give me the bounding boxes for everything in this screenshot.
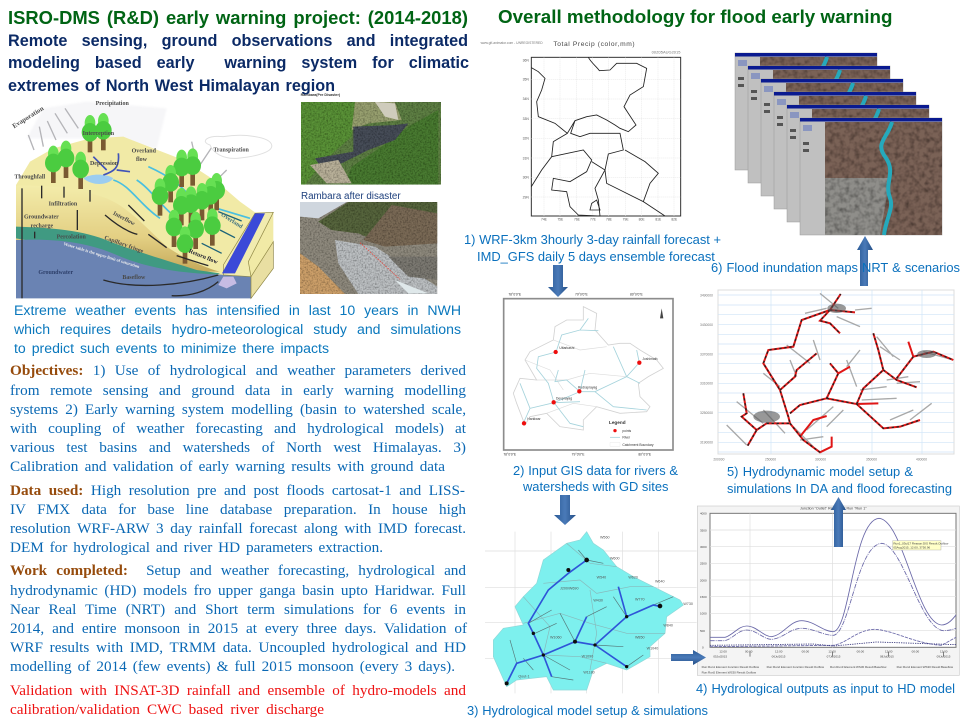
map header text: 00Z05AUG2015: [652, 49, 681, 54]
chart tooltip and axis text: Run:Run1 Element:Junction Result:Outflow: [702, 665, 760, 669]
heading: methodology: Overall methodology for flood early warning: [498, 6, 892, 27]
diagram: hydrological water cycle: [11, 101, 273, 298]
diagram labels: Overland: [220, 212, 244, 231]
chart tooltip and axis text: 12:00: [940, 650, 948, 654]
caption: step 6: 6) Flood inundation maps NRT & scenarios: [711, 260, 960, 275]
map: hydrological model basin: W1180: [583, 670, 595, 674]
caption: step 2: [513, 463, 678, 494]
diagram labels: Interflow: [112, 211, 136, 228]
intro text block: to predict such events to minimize there impacts: [14, 340, 329, 356]
map legend: Catchment Boundary: [622, 443, 654, 447]
axis ticks: 3430000: [700, 323, 713, 327]
map: WRF total precipitation: 35N: [523, 78, 529, 82]
map: WRF total precipitation: 30N: [523, 176, 529, 180]
map: WRF total precipitation: 74E: [541, 218, 548, 222]
text block: objectives: various test basins and watersheds of North west Himalayas. 3): [10, 439, 466, 456]
chart tooltip and axis text: 0: [702, 646, 704, 650]
diagram labels: Depression: [90, 161, 119, 167]
diagram labels: Groundwater: [24, 214, 59, 220]
map: WRF total precipitation: 78E: [606, 218, 613, 222]
text block: work completed: hydrodynamic (HD) models fro upper ganga basin upto Haridwar. Full: [10, 582, 466, 599]
caption: step 3: 3) Hydrological model setup & simulations: [467, 703, 708, 718]
window 6: front map: [800, 118, 942, 235]
map: WRF total precipitation: 29N: [523, 195, 529, 199]
map: GIS rivers and watersheds: Uttarkashi: [559, 346, 575, 350]
caption: step 5: [727, 464, 952, 496]
chart tooltip and axis text: 12:00: [719, 650, 727, 654]
map: hydrological model basin: W540: [597, 575, 606, 579]
intro text block: [14, 302, 461, 356]
chart tooltip and axis text: 05Jul2015: [713, 654, 727, 658]
text block: data used: resolution WRF-ARW 3 day rainfall forecast along with IMD forecast.: [10, 520, 466, 537]
arrow: step 4 to step 5: [831, 497, 846, 547]
caption: step 1: IMD_GFS daily 5 days ensemble forecast: [477, 249, 715, 264]
map: WRF total precipitation: 82E: [671, 218, 678, 222]
chart tooltip and axis text: 00:00: [745, 650, 753, 654]
chart tooltip and axis text: 3500: [700, 528, 707, 532]
map: GIS rivers and watersheds: 79°0'0"E: [572, 452, 585, 456]
flow arrows: [22, 186, 218, 298]
map: GIS rivers and watersheds: 80°0'0"E: [638, 452, 652, 456]
caption: step 4: 4) Hydrological outputs as input to HD model: [696, 681, 955, 696]
chart tooltip and axis text: 3000: [700, 545, 707, 549]
text block: objectives: systems 2) Early warning system modelling (basin to watershed scale,: [10, 401, 466, 418]
text block: work completed: modelling of 2014 (few events) & full 2015 monsoon (every 3 days).: [10, 658, 455, 675]
map: hydrological model basin: W560: [600, 536, 610, 540]
axis ticks: 250000: [765, 458, 776, 462]
map: WRF total precipitation: 77E: [590, 218, 597, 222]
diagram labels: Precipitation: [96, 101, 129, 107]
map legend: [609, 420, 654, 447]
title: project: ISRO-DMS (R&D) early warning project: (2014-2018): [8, 7, 468, 28]
chart tooltip and axis text: 07Jul2015: [827, 654, 841, 658]
axis ticks: 3370000: [700, 352, 713, 356]
chart: hydrograph outputs: [697, 506, 959, 675]
text block: work completed: Near Real Time (NRT) and Short term simulations for 6 events in: [10, 601, 466, 618]
caption: step 1: 1) WRF-3km 3hourly 3-day rainfall forecast +: [464, 232, 721, 247]
map: WRF total precipitation: 81E: [655, 218, 662, 222]
arrow: step 3 to step 4: [671, 650, 706, 665]
river network: [742, 294, 953, 452]
diagram labels: flow: [136, 157, 148, 163]
map: GIS rivers and watersheds: [503, 292, 673, 456]
chart tooltip and axis text: Run:Run5 Element:WS30 Result:Outflow: [702, 670, 757, 674]
text block: work completed: WRF results with IMD, TRMM data. Uncoupled hydrological and HD: [10, 639, 466, 656]
chart tooltip and axis text: Run:Run3 Element:WS30 Result:Baseflow: [830, 665, 887, 669]
chart tooltip and axis text: Run:Run4 Element:WS30 Result:Baseflow: [897, 665, 954, 669]
text block: data used: IV FMX data for base line database preparation. In house high: [10, 501, 466, 518]
arrow: step 1 to step 2: [548, 265, 568, 297]
map: WRF total precipitation: 34N: [523, 97, 529, 101]
arrow: step 2 to step 3: [554, 495, 576, 525]
map: hydrological model basin: [485, 532, 697, 693]
text block: data used: [10, 482, 466, 556]
text block: data used: Data used: High resolution pre and post floods cartosat-1 and LISS-: [10, 482, 465, 499]
diagram labels: Baseflow: [122, 275, 146, 281]
chart tooltip and axis text: Junction "Outlet" Results for Run "Run 1": [800, 506, 867, 510]
axis ticks: 3490000: [700, 294, 713, 298]
text block: work completed: 2014, and entire monsoon in 2015 at every three days. Validation of: [10, 620, 467, 637]
diagram labels: Infiltration: [49, 202, 78, 208]
map: hydrological model basin: W770: [635, 598, 645, 602]
diagram labels: Groundwater: [38, 270, 73, 276]
map: WRF total precipitation: 76E: [574, 218, 581, 222]
map: hydrological model basin: W1040: [647, 646, 658, 650]
map legend: points: [622, 429, 632, 433]
map: WRF total precipitation: 75E: [557, 218, 564, 222]
map: GIS rivers and watersheds: 78°0'0"E: [503, 452, 517, 456]
map: WRF total precipitation: 79E: [623, 218, 629, 222]
text block: work completed: Work completed: Setup and weather forecasting, hydrological and: [10, 562, 466, 579]
arrow: step 5 to step 6: [857, 236, 873, 286]
window 2: [748, 66, 890, 183]
chart tooltip and axis text: 4000: [700, 512, 707, 516]
diagram labels: Throughfall: [14, 174, 45, 180]
photo label: after disaster: Rambara after disaster: [301, 191, 401, 202]
map: hydrological model basin: W620: [628, 576, 638, 580]
map: hydrological model basin: W840: [663, 624, 673, 628]
chart tooltip and axis text: 00:00: [802, 650, 809, 654]
window 1: [735, 53, 877, 170]
axis ticks: [700, 294, 927, 462]
subtitle line 1: Remote sensing, ground observations and integrated: [8, 32, 468, 50]
cross-section labels: [727, 293, 953, 447]
map legend: Legend: [609, 420, 626, 425]
map: hydrodynamic river network: [700, 290, 954, 462]
map: hydrological model basin: W850: [635, 635, 645, 639]
chart tooltip and axis text: 2000: [700, 578, 707, 582]
axis ticks: 400000: [916, 458, 927, 462]
diagram labels: Interception: [83, 131, 115, 137]
map: GIS rivers and watersheds: 80°0'0"E: [630, 292, 644, 296]
chart tooltip and axis text: 1000: [700, 612, 707, 616]
map: hydrological model basin: W1090: [582, 654, 593, 658]
map: hydrological model basin: W730: [683, 602, 693, 606]
chart tooltip and axis text: 500: [700, 629, 705, 633]
map header text: [481, 41, 681, 54]
diagram labels: Water table is the upper limit of saturation: [63, 241, 141, 269]
map: GIS rivers and watersheds: 79°0'0"E: [575, 292, 589, 296]
chart tooltip and axis text: Run:Run2 Element:Junction Result:Outflow: [767, 665, 825, 669]
chart tooltip and axis text: 2500: [700, 562, 707, 566]
map header text: Total Precip (color,mm): [553, 41, 635, 48]
diagram labels: Overland: [132, 148, 157, 154]
window 4: [774, 92, 916, 209]
diagram labels: recharge: [31, 223, 53, 229]
map: WRF total precipitation: 32N: [523, 137, 529, 141]
stack of flood inundation map windows: [735, 53, 942, 235]
map: hydrological model basin: W640: [655, 580, 665, 584]
subtitle line 2: modeling based early warning system for climatic: [8, 54, 469, 72]
map: WRF total precipitation: 33N: [523, 117, 529, 121]
subtitle line 3: extremes of North West Himalayan region: [8, 77, 335, 95]
chart tooltip and axis text: 12:00: [828, 650, 836, 654]
axis ticks: 300000: [815, 458, 826, 462]
evaporation and rain shading: [27, 102, 272, 178]
text block: objectives: with coupling of weather forecasting and hydrological models) at: [10, 420, 466, 437]
map: hydrological model basin: W1060: [550, 635, 562, 639]
text block: work completed: [10, 562, 468, 675]
text block: objectives: Objectives: 1) Use of hydrological and weather parameters derived: [10, 362, 466, 379]
trees: [45, 113, 225, 264]
map: GIS rivers and watersheds: Rudraprayag: [578, 385, 597, 389]
chart tooltip and axis text: [700, 506, 954, 674]
diagram labels: [11, 101, 249, 281]
chart tooltip and axis text: 08Jul2015: [880, 654, 894, 658]
chart tooltip and axis text: 00:00: [857, 650, 864, 654]
text block: validation: calibration/validation CWC based river discharge: [10, 701, 324, 718]
chart tooltip and axis text: 1500: [700, 595, 707, 599]
caption: step 2: watersheds with GD sites: [523, 479, 668, 494]
caption: step 2: 2) Input GIS data for rivers &: [513, 463, 678, 478]
intro text block: Extreme weather events has intensified in last 10 years in NWH: [14, 302, 461, 318]
diagram labels: Percolation: [57, 234, 86, 240]
map: hydrological model basin: W600: [610, 556, 620, 560]
axis ticks: 3190000: [700, 440, 713, 444]
text block: objectives: Calibration and validation of early warning results with ground data: [10, 458, 445, 475]
diagram labels: Transpiration: [213, 148, 249, 154]
chart tooltip and axis text: 12:00: [775, 650, 783, 654]
terrain: [16, 137, 273, 295]
text block: validation: [10, 682, 466, 718]
map: WRF total precipitation: 36N: [523, 58, 529, 62]
axis ticks: 200000: [713, 458, 725, 462]
map: WRF total precipitation: 80E: [639, 218, 645, 222]
text block: data used: DEM for hydrological and river HD parameters extraction.: [10, 539, 383, 556]
photo caption: pre disaster: Rambara(Pre Disaster): [301, 93, 341, 97]
stream: [222, 213, 265, 273]
chart tooltip and axis text: Run1_03ul17 Reason:DIS Result:Outflow: [893, 541, 949, 545]
caption: step 5: simulations In DA and flood forecasting: [727, 481, 952, 496]
intro text block: which requires details hydro-meteorological study and simulations: [14, 321, 461, 337]
caption: step 5: 5) Hydrodynamic model setup &: [727, 464, 913, 479]
photo: Rambara after disaster: [300, 202, 437, 294]
map: WRF total precipitation: 31N: [523, 156, 529, 160]
depression pond and channels: [83, 175, 113, 184]
window 3: [761, 79, 903, 196]
map header text: www.gif-animator.com - UNREGISTERED: [481, 41, 543, 45]
map: GIS rivers and watersheds: Joshimath: [642, 357, 658, 361]
diagram labels: Return flow: [188, 249, 219, 266]
map: GIS rivers and watersheds: Devprayag: [556, 396, 572, 400]
chart tooltip and axis text: 05Aug2015, 12:00, 3750.96: [893, 546, 931, 550]
axis ticks: 3250000: [700, 411, 713, 415]
map: GIS rivers and watersheds: Haridwar: [527, 417, 542, 421]
text block: validation: Validation with INSAT-3D rainfall and ensemble of hydro-models and: [10, 682, 466, 699]
map: hydrological model basin: Qout-1: [518, 674, 530, 678]
axis ticks: 350000: [866, 458, 877, 462]
text block: objectives: [10, 362, 466, 475]
map: WRF total precipitation: [481, 41, 681, 222]
chart tooltip and axis text: 00:00: [912, 650, 919, 654]
caption: step 1: [464, 232, 721, 264]
chart tooltip and axis text: 09Jul2015: [937, 654, 951, 658]
text block: objectives: from remote sensing and ground data in early warning modelling: [10, 382, 466, 399]
map: hydrological model basin: J200/W690: [560, 586, 578, 590]
window 5: [787, 105, 929, 222]
diagram labels: Capillary fringe: [103, 235, 144, 255]
map: hydrological model basin: W430: [593, 599, 603, 603]
chart tooltip and axis text: 06Jul2015: [772, 654, 786, 658]
axis ticks: 3310000: [700, 382, 713, 386]
map legend: River: [622, 436, 631, 440]
photo: Rambara pre disaster: [301, 93, 441, 185]
chart tooltip and axis text: 12:00: [885, 650, 893, 654]
diagram labels: Evaporation: [11, 105, 45, 130]
map: GIS rivers and watersheds: 78°0'0"E: [508, 292, 522, 296]
